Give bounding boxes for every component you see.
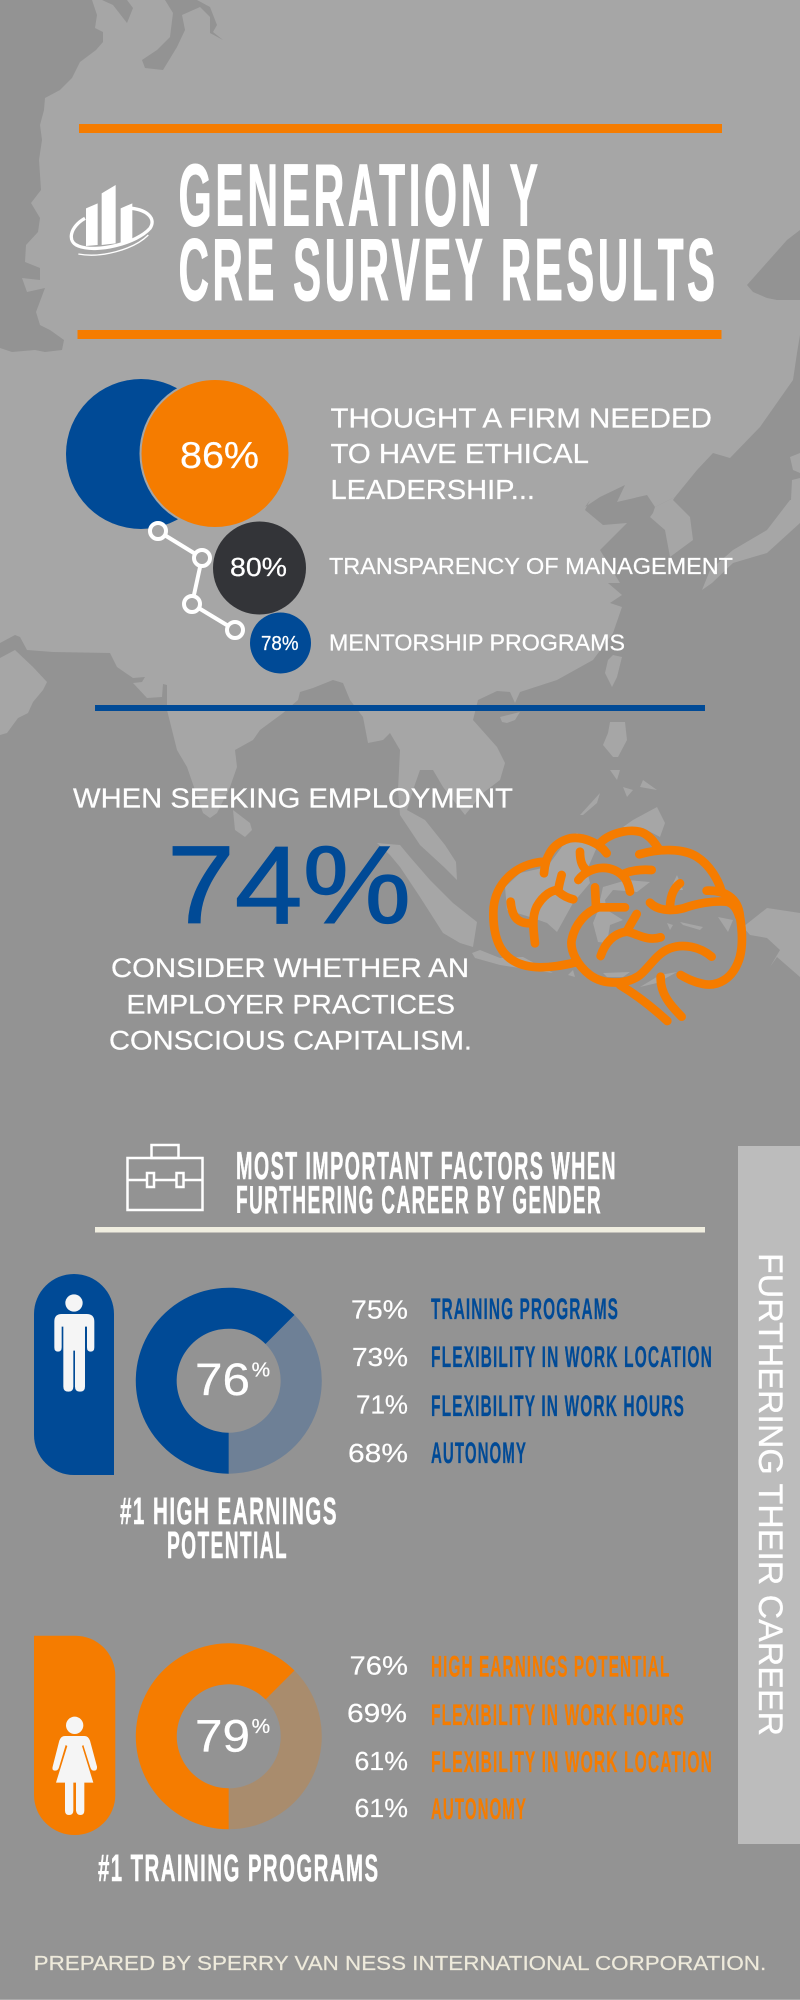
icon: briefcase [128, 1145, 202, 1210]
text: consider [109, 953, 472, 1056]
text: consider: CONSCIOUS CAPITALISM. [109, 1026, 472, 1056]
caption: #1 high earnings potential: #1 HIGH EARNINGS [120, 1491, 338, 1533]
small blue circle 78% [250, 612, 311, 674]
bottom orange rule [78, 330, 722, 339]
donut chart 76%: 76 [195, 1354, 250, 1405]
icon: man [54, 1294, 94, 1392]
side panel: furthering their career: FURTHERING THEIR CAREER [751, 1253, 789, 1736]
panel: ethical leadership stats [66, 379, 733, 674]
text: mentorship: MENTORSHIP PROGRAMS [329, 630, 625, 656]
side panel: furthering their career [738, 1146, 800, 1844]
donut chart 79% [136, 1643, 322, 1829]
male factor list: 71% [356, 1390, 408, 1420]
male factor list [348, 1293, 713, 1470]
caption: #1 training programs: #1 TRAINING PROGRAMS [98, 1848, 380, 1890]
text: consider: CONSIDER WHETHER AN [111, 953, 469, 983]
caption: #1 high earnings potential [120, 1491, 338, 1567]
icon: company logo with bars and ring [71, 185, 152, 255]
donut chart 79%: 79 [195, 1711, 250, 1762]
text: when seeking employment: WHEN SEEKING EMPLOYMENT [73, 782, 513, 814]
big number 74%: 74% [167, 824, 411, 947]
male factor list: 68% [348, 1438, 408, 1468]
donut chart 76% [136, 1288, 322, 1474]
female factor list: 69% [347, 1698, 407, 1728]
top orange rule [79, 124, 722, 133]
orange circle 86%: 86% [180, 435, 259, 476]
title [178, 146, 718, 319]
panel: male results [34, 1274, 713, 1567]
icon: brain [493, 831, 742, 1021]
female factor list: 61% [354, 1746, 408, 1776]
male factor list: 73% [352, 1342, 408, 1372]
male factor list: 75% [351, 1294, 408, 1324]
male factor list: AUTONOMY [431, 1437, 527, 1470]
panel: female results [34, 1636, 713, 1890]
donut chart 76%: % [252, 1360, 270, 1382]
blue divider [95, 705, 705, 711]
text: ethical leadership: LEADERSHIP... [330, 474, 535, 505]
male pill [34, 1274, 114, 1475]
small blue circle 78%: 78% [261, 633, 299, 655]
female factor list [347, 1651, 713, 1826]
heading: most important factors [236, 1145, 617, 1222]
caption: #1 high earnings potential: POTENTIAL [167, 1525, 288, 1567]
female factor list: 61% [354, 1793, 408, 1823]
male factor list: TRAINING PROGRAMS [431, 1293, 619, 1326]
icon: woman [52, 1717, 97, 1815]
female pill [34, 1636, 115, 1835]
cream divider [95, 1227, 705, 1232]
text: ethical leadership [330, 402, 712, 505]
orange circle 86% [140, 379, 290, 528]
panel: conscious capitalism [73, 782, 513, 1056]
footer credit: PREPARED BY SPERRY VAN NESS INTERNATIONAL CORPORATION. [34, 1953, 766, 1975]
text: ethical leadership: THOUGHT A FIRM NEEDED [330, 402, 712, 434]
blue circle backing [66, 379, 216, 529]
text: consider: EMPLOYER PRACTICES [126, 990, 455, 1020]
text: transparency: TRANSPARENCY OF MANAGEMENT [329, 553, 733, 579]
connector with nodes [150, 523, 243, 638]
text: ethical leadership: TO HAVE ETHICAL [330, 438, 589, 469]
female factor list: AUTONOMY [431, 1793, 527, 1826]
dark circle 80%: 80% [230, 552, 287, 582]
dark circle 80% [213, 522, 306, 614]
donut chart 79%: % [252, 1716, 270, 1738]
female factor list: 76% [350, 1651, 408, 1681]
